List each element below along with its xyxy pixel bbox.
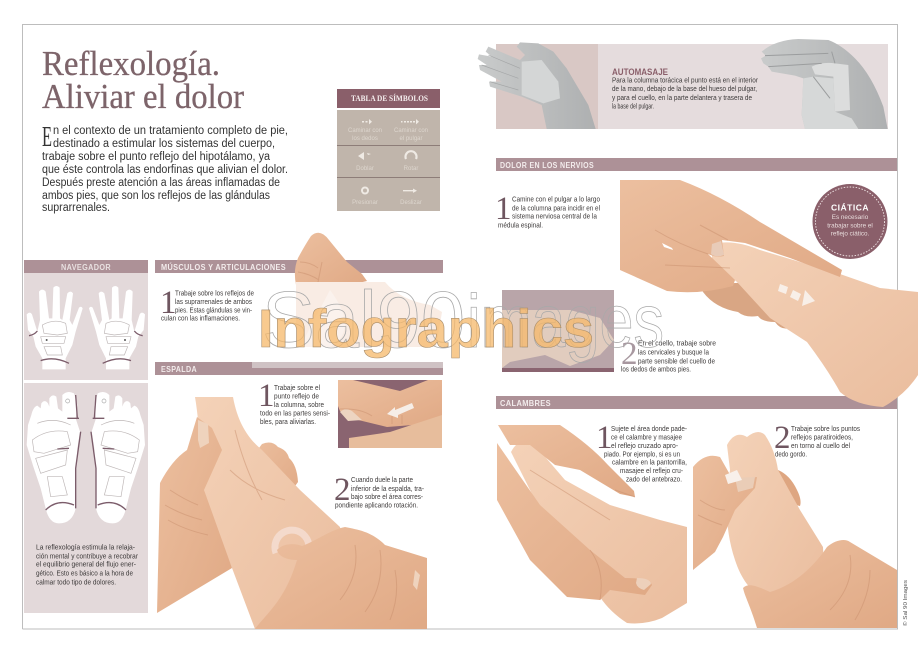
espalda step 1: Trabaje sobre el [274, 385, 320, 392]
músculos step 1: Trabaje sobre los reflejos de [175, 290, 254, 298]
músculos step 1 [160, 285, 254, 322]
section bar: espalda: ESPALDA [161, 365, 197, 374]
calambres step 2: dedo gordo. [775, 452, 807, 458]
symbol: caminar con los dedos: Caminar con [348, 128, 382, 134]
espalda step 2: Cuando duele la parte [351, 477, 413, 484]
dolor step 1 [495, 191, 600, 230]
espalda step 2: bajo sobre el área corres- [351, 494, 424, 501]
calambres step 1: 1 [596, 420, 612, 456]
calambres step 1: el reflejo cruzado apro- [611, 443, 679, 450]
symbol: presionar: Presionar [352, 200, 378, 206]
callout: ciática: reflejo ciático. [831, 230, 869, 238]
intro text block: Después preste atención a las áreas inflamadas de [42, 177, 280, 189]
intro text block: E [42, 122, 52, 153]
músculos step 1: culan con las inflamaciones. [161, 316, 240, 322]
navegador text: calmar todo tipo de dolores. [36, 580, 116, 586]
calambres step 1: masajee el reflejo cru- [620, 468, 684, 475]
dolor step 2 [621, 336, 716, 374]
title: Reflexología. [42, 44, 220, 83]
navegador heading: NAVEGADOR [61, 263, 111, 272]
symbol: caminar con los dedos: los dedos [352, 136, 378, 142]
callout: ciática: CIÁTICA [831, 202, 869, 212]
dolor step 1: Camine con el pulgar a lo largo [512, 196, 600, 204]
espalda step 1 [258, 378, 331, 426]
section bar: dolor en los nervios [496, 158, 897, 171]
calambres step 2: Trabaje sobre los puntos [791, 426, 860, 433]
automasaje text: AUTOMASAJE [612, 67, 668, 77]
dolor step 2: los dedos de ambos pies. [621, 366, 691, 374]
calambres step 1 [596, 420, 688, 484]
symbol: caminar con el pulgar [394, 119, 428, 142]
intro text block: ambos pies, que son los reflejos de las glándulas [42, 190, 270, 202]
foot reflex maps [27, 392, 145, 523]
intro text block: suprarrenales. [42, 202, 110, 214]
dolor step 2: las cervicales y busque la [638, 350, 709, 356]
dolor small photo [502, 290, 614, 372]
calambres photo 2 [693, 432, 897, 628]
dolor step 1: médula espinal. [498, 222, 543, 230]
intro text block: que éste controla las endorfinas que alivian el dolor. [42, 164, 288, 176]
calambres step 2: en torno al cuello del [791, 443, 850, 450]
callout: ciática [812, 184, 888, 259]
intro text block [42, 122, 288, 214]
hand reflex maps [27, 286, 145, 369]
right grey hand [761, 39, 888, 129]
panel: tabla de símbolos [337, 89, 440, 211]
symbol: rotar: Rotar [404, 166, 418, 172]
dolor step 1: sistema nerviosa central de la [512, 214, 597, 220]
section bar: espalda [155, 362, 443, 375]
title: Aliviar el dolor [42, 77, 244, 116]
callout: ciática: trabajar sobre el [827, 222, 873, 230]
calambres step 2 [774, 420, 860, 458]
symbol: caminar con el pulgar: Caminar con [394, 128, 428, 134]
watermark: Sal90 [262, 275, 465, 364]
calambres step 2: reflejos paratiroideos, [791, 434, 853, 442]
watermark [258, 275, 664, 364]
navegador text: el equilibrio general del flujo ener- [36, 562, 137, 568]
espalda small photo [338, 380, 442, 448]
músculos step 1: pies. Estas glándulas se vin- [175, 308, 253, 314]
callout: ciática: Es necesario [832, 214, 869, 221]
intro text block: destinado a estimular los sistemas del cuerpo, [53, 138, 275, 150]
navegador text: gético. Esto es básico a la hora de [36, 570, 133, 578]
espalda step 2 [334, 472, 425, 510]
dolor photo: hand walking thumb on foot [620, 180, 918, 407]
symbol: deslizar: Deslizar [400, 200, 422, 206]
dolor step 1: de la columna para incidir en el [512, 206, 600, 212]
calambres step 1: calambre en la pantorrilla, [612, 460, 687, 466]
symbol: caminar con los dedos [348, 119, 382, 142]
symbol: caminar con el pulgar: el pulgar [399, 136, 423, 142]
symbol table heading: TABLA DE SÍMBOLOS [351, 93, 428, 103]
espalda main photo: foot and hands [157, 397, 427, 629]
dolor step 2: 2 [621, 336, 638, 372]
direction arrows [778, 284, 815, 306]
panel: navegador [24, 260, 148, 613]
calambres step 2: 2 [774, 420, 790, 456]
section bar: dolor en los nervios: DOLOR EN LOS NERVIOS [500, 161, 594, 170]
dolor step 2: parte sensible del cuello de [638, 358, 715, 366]
calambres step 1: Sujete el área donde pade- [611, 426, 688, 433]
espalda step 1: todo en las partes sensi- [260, 410, 331, 418]
intro text block: n el contexto de un tratamiento completo de pie, [53, 125, 288, 137]
automasaje text: y para el cuello, en la parte delantera y trasera de [612, 95, 752, 102]
automasaje text [612, 67, 759, 110]
rotation symbol [275, 530, 309, 558]
espalda step 1: la columna, sobre [274, 402, 324, 409]
section bar: músculos y articulaciones: MÚSCULOS Y ARTICULACIONES [161, 263, 286, 272]
espalda step 2: pondiente aplicando rotación. [335, 502, 418, 510]
intro text block: trabaje sobre el punto reflejo del hipotálamo, ya [42, 151, 271, 163]
calambres step 1: ce el calambre y masajee [611, 434, 682, 442]
dolor step 1: 1 [495, 191, 512, 227]
automasaje text: Para la columna torácica el punto está en el interior [612, 78, 759, 84]
copyright credit: © Sal 90 Images [902, 579, 909, 626]
automasaje text: de la mano, debajo de la base del hueso del pulgar, [612, 86, 757, 93]
photo: foot held in fist [295, 233, 442, 347]
calambres step 1: zado del antebrazo. [626, 476, 682, 484]
panel: automasaje [478, 39, 888, 129]
espalda step 1: punto reflejo de [274, 394, 319, 400]
espalda step 1: 1 [258, 378, 274, 414]
músculos step 1: 1 [160, 285, 176, 321]
navegador text [36, 544, 139, 586]
section bar: calambres [496, 396, 897, 409]
title [42, 44, 244, 116]
section bar: músculos y articulaciones [155, 260, 443, 273]
espalda step 2: 2 [334, 472, 350, 508]
watermark: images [467, 279, 664, 363]
automasaje text: la base del pulgar. [612, 104, 654, 110]
espalda step 2: inferior de la espalda, tra- [351, 486, 425, 493]
dolor step 2: En el cuello, trabaje sobre [638, 340, 716, 348]
músculos step 1: las suprarrenales de ambos [175, 299, 252, 306]
espalda step 1: bles, para aliviarlas. [260, 419, 316, 426]
calambres step 1: piado. Por ejemplo, si es un [604, 452, 680, 458]
section bar: calambres: CALAMBRES [500, 399, 551, 408]
navegador text: ción mental y contribuye a recobrar [36, 554, 139, 560]
arrow [387, 403, 414, 418]
symbol: doblar: Doblar [356, 166, 374, 172]
left grey hand [478, 42, 596, 129]
watermark: Infographics [258, 299, 594, 359]
navegador text: La reflexología estimula la relaja- [36, 544, 136, 552]
calambres photo 1 [497, 425, 687, 623]
